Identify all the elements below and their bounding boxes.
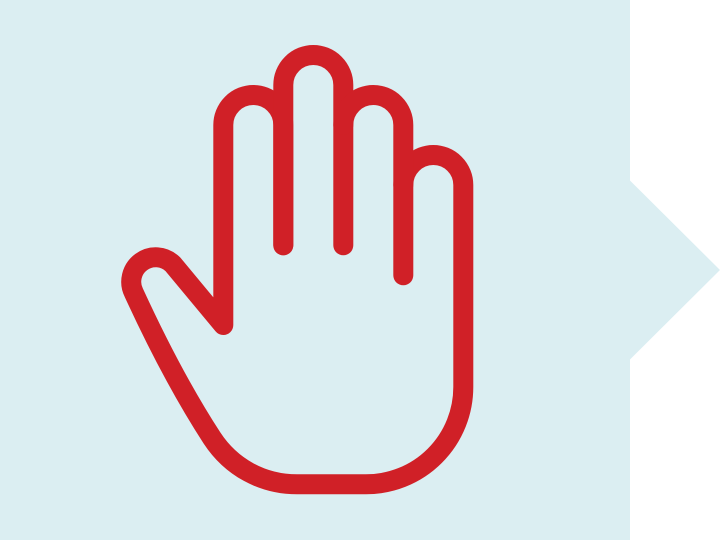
middle finger <box>283 55 343 245</box>
icon: raised red hand outline <box>131 55 463 484</box>
ring finger <box>343 95 403 275</box>
hand outer contour with index finger and thumb <box>131 95 463 484</box>
